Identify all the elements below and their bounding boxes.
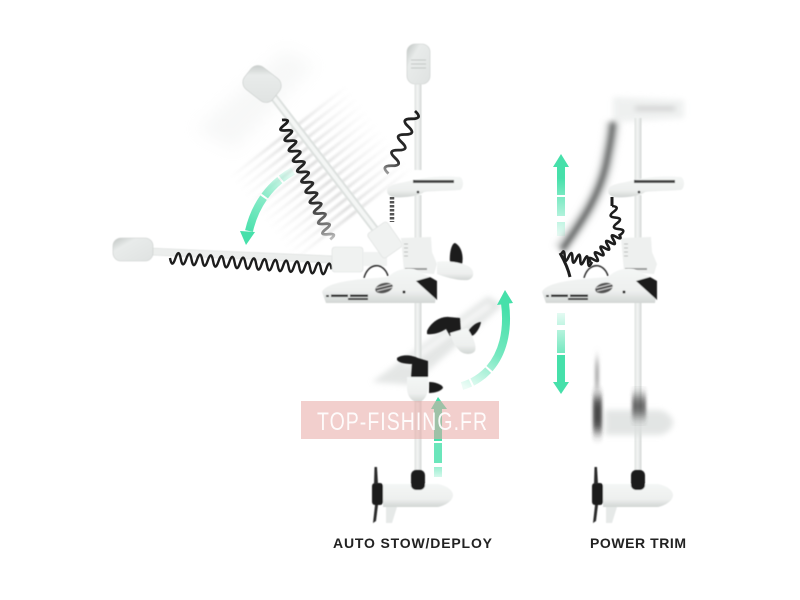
green arc arrow: deploy up xyxy=(462,290,513,386)
watermark text: TOP-FISHING.FR xyxy=(317,408,487,436)
power trim: column xyxy=(621,237,657,274)
power trim: green arrow down xyxy=(553,313,569,394)
horizontal arm with handle xyxy=(113,238,334,263)
power trim: blurred upper head xyxy=(613,97,684,122)
control head: stow/deploy xyxy=(387,176,463,197)
green arc arrow: stow down xyxy=(240,171,293,245)
label: power trim: POWER TRIM xyxy=(590,535,686,551)
short cord below head xyxy=(390,197,394,222)
trolling motor: vertical shaft, stow/deploy xyxy=(414,84,422,475)
pivot collars xyxy=(332,221,403,272)
power trim: coiled cord xyxy=(560,197,624,277)
watermark band xyxy=(301,401,499,439)
power trim: blurred coil xyxy=(560,122,613,250)
motion blur: propeller stow streak xyxy=(372,296,503,385)
motion blur: near tilted handle xyxy=(195,50,315,150)
label: auto stow/deploy: AUTO STOW/DEPLOY xyxy=(333,535,493,551)
motor deployed: stow/deploy xyxy=(372,467,453,523)
power trim: blurred motor xyxy=(593,360,673,435)
motor mid-position 2 xyxy=(397,355,443,402)
power trim: control head xyxy=(608,176,684,197)
coiled cord: tilted position xyxy=(277,118,335,241)
tilted arm with handle xyxy=(239,62,378,233)
mount base: stow/deploy xyxy=(322,266,437,303)
coiled cord: upright position xyxy=(383,109,420,176)
coiled cord: horizontal position xyxy=(170,253,332,275)
column: stow/deploy xyxy=(401,237,437,274)
stowed propeller beside mount xyxy=(437,243,473,280)
motor mid-position 1 xyxy=(427,317,481,354)
power trim: green arrow up xyxy=(553,154,569,236)
vertical green arrow: deploy xyxy=(431,397,447,477)
power trim: mount base xyxy=(542,266,657,303)
power trim: shaft xyxy=(634,118,642,472)
motion blur: stow streaks behind tilted arm xyxy=(229,86,412,260)
upright handle xyxy=(407,44,430,84)
power trim: motor lowered xyxy=(592,467,673,523)
